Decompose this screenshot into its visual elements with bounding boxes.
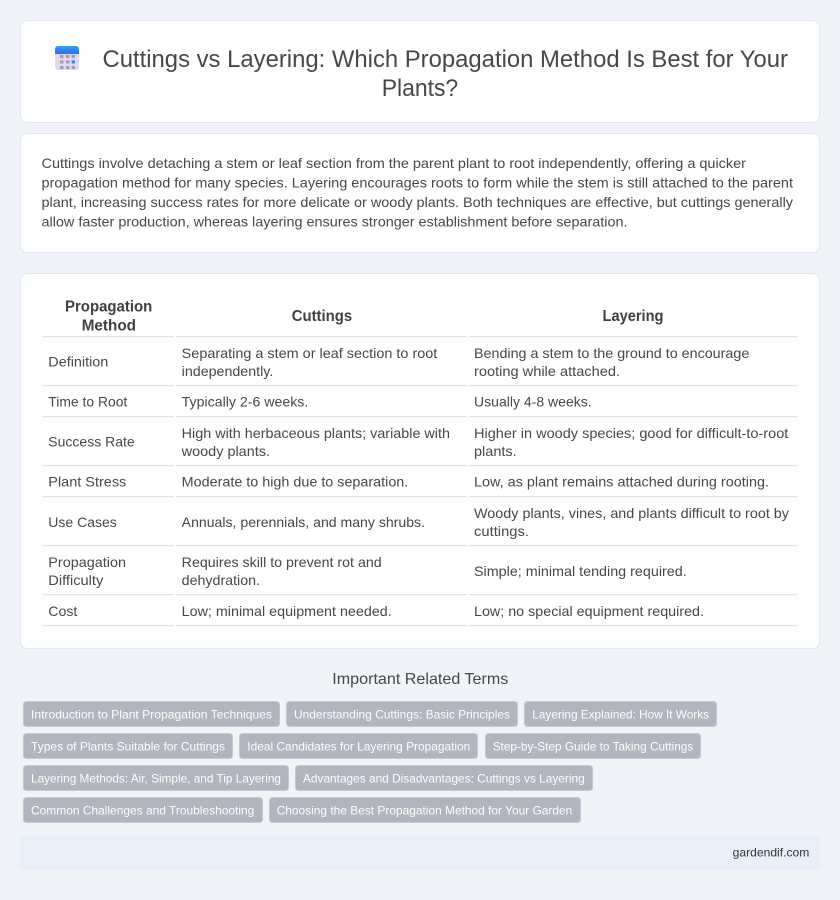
row: success rate: plants. xyxy=(474,443,517,459)
text block: summary: allow faster production, whereas layering ensures stronger establishment before separation. xyxy=(42,214,628,230)
row: definition: independently. xyxy=(182,363,273,379)
row: plant stress: Plant Stress xyxy=(48,474,126,490)
tag xyxy=(240,734,478,758)
heading: related terms: Important Related Terms xyxy=(332,671,508,688)
tag: Introduction to Plant Propagation Techniques xyxy=(31,707,272,721)
row: propagation difficulty: Requires skill to prevent rot and xyxy=(182,554,382,570)
panel: title xyxy=(20,20,820,122)
row: propagation difficulty xyxy=(48,554,687,588)
row: time to root: Usually 4-8 weeks. xyxy=(474,394,592,410)
panel: introduction xyxy=(20,134,820,252)
footer: gardendif.com xyxy=(733,846,809,860)
row: definition: rooting while attached. xyxy=(474,363,620,379)
row: success rate: woody plants. xyxy=(181,443,270,459)
row: definition: Separating a stem or leaf section to root xyxy=(182,345,437,361)
tag xyxy=(24,702,280,726)
table header: Layering xyxy=(602,308,664,325)
tag: Layering Methods: Air, Simple, and Tip Layering xyxy=(31,771,281,785)
heading: Plants? xyxy=(382,75,458,102)
row: propagation difficulty: dehydration. xyxy=(182,572,260,588)
tag: Types of Plants Suitable for Cuttings xyxy=(31,739,225,753)
table header: Method xyxy=(82,318,136,334)
icon: calendar xyxy=(55,46,79,70)
tag: Ideal Candidates for Layering Propagation xyxy=(247,739,470,753)
row: cost: Low; no special equipment required. xyxy=(474,603,704,619)
tag: Advantages and Disadvantages: Cuttings vs Layering xyxy=(303,771,585,785)
row: success rate: Higher in woody species; good for difficult-to-root xyxy=(474,425,788,441)
row: use cases: Woody plants, vines, and plants difficult to root by xyxy=(474,505,789,521)
tag: Common Challenges and Troubleshooting xyxy=(31,803,254,817)
tag xyxy=(286,702,518,726)
row: time to root: Typically 2-6 weeks. xyxy=(182,394,308,410)
tag xyxy=(524,702,716,726)
row: plant stress: Moderate to high due to separation. xyxy=(182,474,408,490)
row: propagation difficulty: Simple; minimal tending required. xyxy=(474,563,687,579)
table header: Propagation xyxy=(65,298,152,316)
row: plant stress xyxy=(48,474,769,490)
tag: Layering Explained: How It Works xyxy=(532,707,709,721)
tag xyxy=(24,734,232,758)
tag: Understanding Cuttings: Basic Principles xyxy=(294,707,510,721)
row: use cases: Use Cases xyxy=(48,514,117,530)
row: success rate: Success Rate xyxy=(48,434,135,450)
row: use cases: Annuals, perennials, and many shrubs. xyxy=(182,514,425,530)
row: cost: Cost xyxy=(48,603,77,619)
row: success rate: High with herbaceous plants; variable with xyxy=(182,425,450,441)
row: propagation difficulty: Propagation xyxy=(48,554,126,570)
heading: Cuttings vs Layering: Which Propagation Method Is Best for Your xyxy=(102,46,788,73)
text block: summary: plant, increasing success rates for more delicate or woody plants. Both techniques are effective, but cuttings generally xyxy=(42,194,793,210)
row: time to root: Time to Root xyxy=(48,394,127,410)
text block: summary: Cuttings involve detaching a stem or leaf section from the parent plant to root independently, offering a quicker xyxy=(42,155,746,171)
row: definition: Definition xyxy=(48,354,108,370)
row: propagation difficulty: Difficulty xyxy=(48,572,103,588)
text block: summary: propagation method for many species. Layering encourages roots to form while the stem is still attached to the parent xyxy=(42,174,793,190)
table header: Cuttings xyxy=(292,308,352,325)
tag: Step-by-Step Guide to Taking Cuttings xyxy=(493,739,693,753)
tag xyxy=(296,766,592,790)
row: definition xyxy=(48,345,750,379)
row: time to root xyxy=(48,394,592,410)
row: definition: Bending a stem to the ground to encourage xyxy=(474,345,750,361)
heading xyxy=(102,46,788,102)
footer xyxy=(20,836,820,870)
panel: comparison table xyxy=(20,274,820,648)
row: use cases: cuttings. xyxy=(474,523,529,539)
related term tags xyxy=(24,702,716,822)
tag xyxy=(24,798,262,822)
row: success rate xyxy=(48,425,788,459)
row: plant stress: Low, as plant remains attached during rooting. xyxy=(474,474,769,490)
tag xyxy=(486,734,700,758)
tag: Choosing the Best Propagation Method for Your Garden xyxy=(277,803,572,817)
row: cost: Low; minimal equipment needed. xyxy=(182,603,392,619)
row: cost xyxy=(48,603,704,619)
tag xyxy=(24,766,288,790)
text block: summary xyxy=(42,155,793,230)
table header xyxy=(65,298,664,334)
row: use cases xyxy=(48,505,789,539)
tag xyxy=(270,798,580,822)
